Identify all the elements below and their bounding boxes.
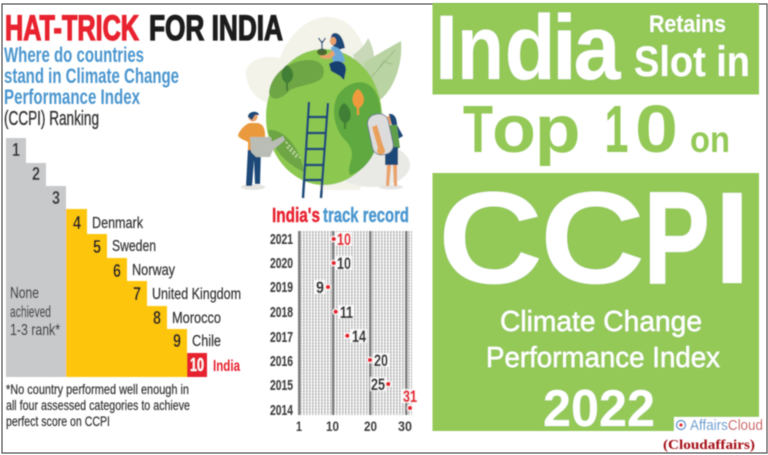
country labels: India	[213, 358, 240, 375]
data labels: 25	[371, 375, 385, 394]
note: none achieved 1-3 rank: None	[10, 285, 39, 302]
green panel: CCPI climate change performance index 2022	[432, 164, 759, 438]
data labels: 9	[316, 278, 324, 297]
green panel: CCPI climate change performance index 2022: Climate Change	[500, 306, 702, 338]
word: India	[435, 0, 621, 99]
logo: AffairsCloud: AffairsCloud	[690, 417, 763, 434]
note: none achieved 1-3 rank	[10, 285, 60, 339]
year labels: 2016	[270, 354, 293, 370]
axis labels: 30	[398, 418, 412, 434]
heading: where do countries stand	[4, 44, 179, 130]
rank numbers: 4	[73, 213, 81, 233]
axis labels	[296, 418, 412, 434]
icon: ladder	[303, 102, 328, 198]
rank numbers: 6	[113, 261, 121, 281]
heading: where do countries stand: (CCPI) Ranking	[4, 108, 99, 130]
icon: leaves	[353, 38, 374, 75]
axis labels: 20	[364, 418, 377, 434]
chart heading	[272, 205, 409, 227]
axis labels: 1	[296, 418, 302, 434]
rank numbers: 10	[190, 355, 204, 375]
year labels: 2019	[270, 280, 293, 296]
panel: right title	[432, 0, 765, 453]
rank numbers: 1	[12, 140, 20, 160]
title: hat-trick for India: FOR INDIA	[149, 9, 283, 48]
rank numbers: 8	[153, 308, 161, 328]
word: CCPI: C	[540, 164, 645, 311]
rank numbers: 7	[133, 284, 141, 304]
heading: where do countries stand: stand in Climate Change	[4, 65, 179, 88]
note: none achieved 1-3 rank: achieved	[10, 304, 51, 321]
word: CCPI: C	[438, 164, 543, 311]
person: man with watering can	[238, 112, 300, 190]
heading: top 10 on: 1	[604, 92, 628, 167]
word: CCPI	[438, 164, 750, 311]
word: CCPI: P	[644, 164, 710, 311]
chart heading: track record	[323, 205, 409, 227]
year labels: 2017	[270, 330, 293, 346]
heading: top 10 on: T	[463, 92, 493, 167]
data points	[325, 236, 413, 411]
title: hat-trick for India: HAT-TRICK	[5, 9, 139, 48]
red step: rank 10	[187, 353, 207, 377]
rank numbers: 9	[173, 331, 181, 351]
year labels: 2020	[270, 256, 293, 272]
data labels: 11	[340, 303, 353, 322]
title: hat-trick for India	[5, 9, 283, 48]
icon: globe	[266, 49, 382, 185]
year labels: 2018	[270, 305, 293, 321]
heading: where do countries stand: Where do countries	[4, 44, 144, 67]
footnote: *No country performed well enough in	[6, 381, 189, 397]
green banner: India retains slot in: Slot in	[634, 38, 750, 86]
heading: top 10 on: on	[690, 119, 730, 160]
staircase chart: CCPI ranking	[6, 17, 418, 434]
data labels: 10	[337, 254, 351, 273]
icon: trees	[282, 65, 293, 91]
rank numbers: 2	[32, 164, 40, 184]
year labels: 2014	[270, 403, 293, 419]
word: India: n	[457, 0, 504, 99]
person: planting sapling at top	[317, 33, 346, 80]
country labels: Sweden	[112, 238, 156, 255]
chart heading: India's	[272, 205, 320, 227]
note: none achieved 1-3 rank: 1-3 rank*	[10, 322, 60, 339]
word: India: i	[552, 0, 577, 99]
data labels: 14	[352, 327, 366, 346]
word: India: I	[435, 0, 458, 99]
word: CCPI: I	[714, 164, 750, 311]
footnote: all four assessed categories to achieve	[6, 397, 190, 413]
heading: top 10 on: p	[535, 92, 581, 167]
data labels: 10	[337, 230, 351, 249]
footnote	[6, 381, 190, 429]
green panel: CCPI climate change performance index 2022: 2022	[543, 380, 655, 438]
data labels: 31	[403, 387, 417, 406]
country labels: Denmark	[92, 215, 143, 232]
word: India: d	[505, 0, 556, 99]
heading: top 10 on: 0	[635, 92, 678, 167]
dotted grid	[299, 231, 412, 415]
year labels: 2021	[270, 232, 293, 248]
label halos	[315, 232, 418, 403]
footnote: perfect score on CCPI	[6, 413, 110, 429]
credit: Cloudaffairs: (Cloudaffairs)	[663, 438, 755, 453]
illustration: people tending green globe	[238, 17, 410, 198]
rank numbers: 5	[93, 237, 101, 257]
person: woman with thermometer	[366, 112, 403, 190]
rank numbers: 3	[52, 188, 60, 208]
ground shadow	[334, 143, 410, 187]
chart: India's track record	[270, 205, 418, 434]
data labels	[316, 230, 417, 406]
beige blob behind globe	[246, 17, 385, 190]
country labels: Morocco	[172, 310, 221, 327]
year labels	[270, 232, 293, 419]
green banner: India retains slot in	[432, 0, 759, 99]
heading: where do countries stand: Performance Index	[4, 86, 140, 109]
word: India: a	[574, 0, 621, 99]
rank numbers	[12, 140, 204, 375]
heading: top 10 on	[463, 92, 730, 167]
axis labels: 10	[326, 418, 339, 434]
yellow steps: ranks 4 to 9	[66, 209, 187, 377]
year labels: 2015	[270, 378, 293, 394]
green banner: India retains slot in: Retains	[649, 11, 726, 38]
green panel: CCPI climate change performance index 2022: Performance Index	[486, 342, 720, 374]
gray steps: ranks 1 to 3	[6, 138, 66, 377]
data labels: 20	[374, 351, 388, 370]
country labels: United Kingdom	[152, 286, 241, 303]
country labels	[92, 215, 241, 375]
country labels: Norway	[132, 262, 175, 279]
heading: top 10 on: o	[492, 92, 536, 167]
country labels: Chile	[192, 333, 221, 350]
